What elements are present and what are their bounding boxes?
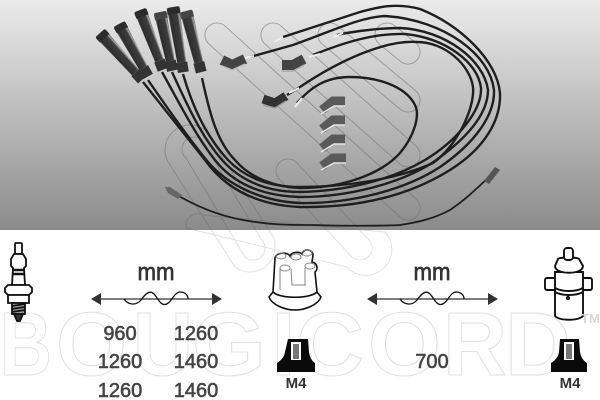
elbow connector 3 [263,96,286,108]
coil wire end right [484,167,500,184]
loose angled connectors [222,59,346,170]
wire length: coil lead: 700 [415,351,449,373]
plug boots [95,6,208,84]
terminal 5 [289,88,299,93]
coil wire [172,178,488,226]
wire lengths left column [98,323,142,400]
icon: wavy length arrow left [91,292,222,305]
icon: M4 connector left [277,339,315,372]
boot 5 [167,6,190,73]
boot 6 [180,9,208,74]
length heading left: mm [138,259,174,286]
terminal 3 [334,33,343,37]
elbow connector 2 [282,59,304,71]
watermark wordmark [0,295,571,395]
terminal 4 [309,54,320,57]
watermark wordmark: I [272,295,295,395]
wire terminals [245,33,343,107]
small elbow 3 [321,139,345,152]
watermark wordmark: O [368,295,441,395]
watermark wordmark: U [133,295,193,395]
watermark wordmark: R [443,295,507,395]
ignition wires [143,6,500,226]
icon: M4 connector right [551,339,587,372]
boot 3 [134,8,169,72]
terminal 6 [295,98,302,107]
boot 4 [154,11,179,72]
watermark wordmark: D [505,295,571,395]
boot 2 [113,21,154,80]
wire 1 [143,6,500,207]
terminal 1 [274,37,283,42]
trademark mark: TM [581,311,600,326]
watermark wordmark: O [56,295,127,395]
boot 1 [95,29,147,84]
wire lengths right column: 1460 [174,351,218,373]
wire 6 [202,77,417,188]
wire 3 [162,28,488,197]
terminal 2 [245,56,254,58]
wire lengths left column: 1260 [98,351,142,373]
icon: ignition coil [545,248,592,320]
label: M4 left: M4 [286,375,307,392]
small elbow 1 [321,101,345,114]
label: M4 right: M4 [560,375,581,392]
small elbow 4 [321,158,346,170]
length heading right: mm [414,259,450,286]
icon: wavy length arrow right [367,292,498,305]
wire lengths right column [174,323,218,400]
icon: distributor cap [269,250,321,310]
watermark logo stripes [165,23,420,275]
wire lengths left column: 960 [103,323,137,345]
watermark wordmark: C [296,295,364,395]
wire lengths right column: 1260 [174,323,218,345]
watermark wordmark: G [192,295,266,395]
wire 2 [148,16,494,203]
wire 5 [183,42,473,187]
coil wire end left [165,187,182,199]
watermark wordmark: B [0,295,52,395]
photo background band [0,0,600,230]
wire 4 [172,34,481,192]
elbow connector 1 [222,59,245,70]
small elbow 2 [321,120,345,133]
icon: spark plug [5,243,32,321]
